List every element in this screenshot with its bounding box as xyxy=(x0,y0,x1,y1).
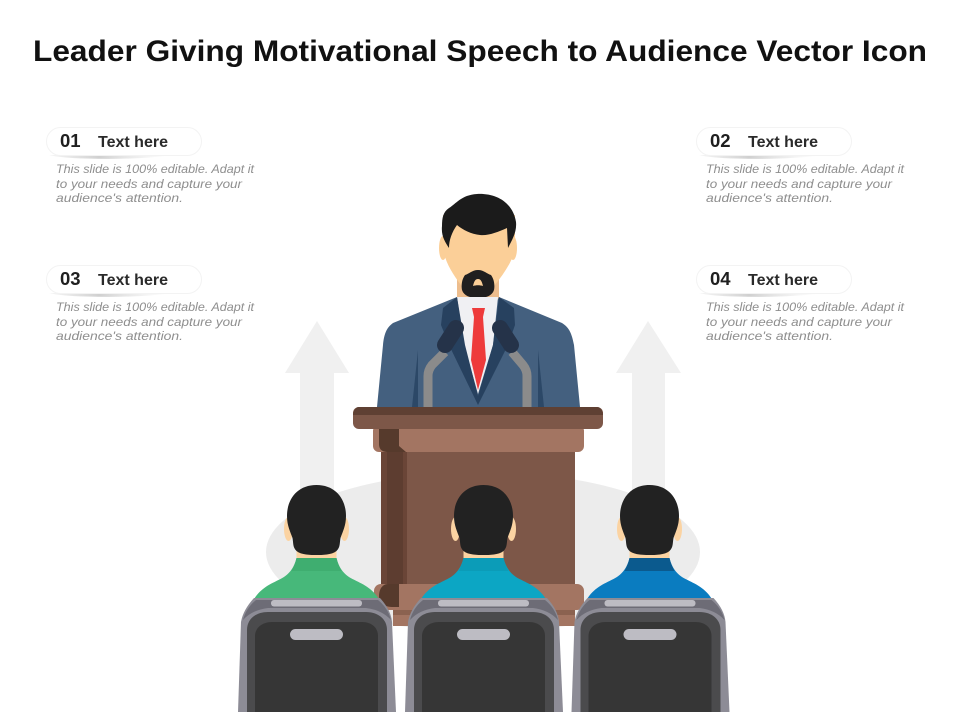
chair: right xyxy=(572,598,730,712)
speaker face xyxy=(443,215,515,298)
podium xyxy=(353,407,603,626)
text block 01 xyxy=(46,128,255,205)
text block 01: to your needs and capture your xyxy=(56,177,243,191)
chair: left xyxy=(238,598,396,712)
text block 02: 02 xyxy=(710,130,731,151)
speaker lapels xyxy=(441,297,515,405)
speaker beard xyxy=(462,270,494,298)
text block 02 xyxy=(696,128,905,205)
speaker shirt xyxy=(457,297,498,394)
speaker xyxy=(377,194,580,407)
text block 04 xyxy=(696,266,905,343)
text block 03: Text here xyxy=(98,272,168,289)
podium upper tier xyxy=(373,425,584,452)
arrow: right xyxy=(616,321,681,490)
text block 03 xyxy=(46,266,255,343)
text block 03: 03 xyxy=(60,268,81,289)
text block 04: This slide is 100% editable. Adapt it xyxy=(706,300,905,314)
background ellipse xyxy=(266,472,700,632)
text block 04: audience's attention. xyxy=(706,329,833,343)
text block 02: This slide is 100% editable. Adapt it xyxy=(706,162,905,176)
text block 01: audience's attention. xyxy=(56,191,183,205)
arrow: left xyxy=(285,321,349,490)
podium top xyxy=(353,407,603,429)
title: Leader Giving Motivational Speech to Audience Vector Icon xyxy=(33,35,927,68)
speaker hair xyxy=(442,194,516,248)
microphone heads xyxy=(445,328,511,345)
podium body xyxy=(381,452,575,586)
suit shadow folds xyxy=(412,350,544,407)
text block 04: to your needs and capture your xyxy=(706,315,893,329)
speaker neck and ears xyxy=(439,236,517,300)
text block 03: audience's attention. xyxy=(56,329,183,343)
podium base xyxy=(393,600,575,626)
text block 02: audience's attention. xyxy=(706,191,833,205)
text block 02: Text here xyxy=(748,134,818,151)
text block 01: 01 xyxy=(60,130,81,151)
audience member: teal xyxy=(420,485,546,600)
audience member: green xyxy=(254,485,380,600)
podium side column xyxy=(381,452,407,586)
chair: middle xyxy=(405,598,563,712)
text block 04: 04 xyxy=(710,268,731,289)
text block 02: to your needs and capture your xyxy=(706,177,893,191)
text block 03: This slide is 100% editable. Adapt it xyxy=(56,300,255,314)
text block 01: This slide is 100% editable. Adapt it xyxy=(56,162,255,176)
microphone stands xyxy=(428,352,527,407)
speaker tie xyxy=(471,308,486,390)
audience member: blue xyxy=(586,485,712,600)
text block 03: to your needs and capture your xyxy=(56,315,243,329)
text block 04: Text here xyxy=(748,272,818,289)
text block 01: Text here xyxy=(98,134,168,151)
speaker suit xyxy=(377,297,580,407)
